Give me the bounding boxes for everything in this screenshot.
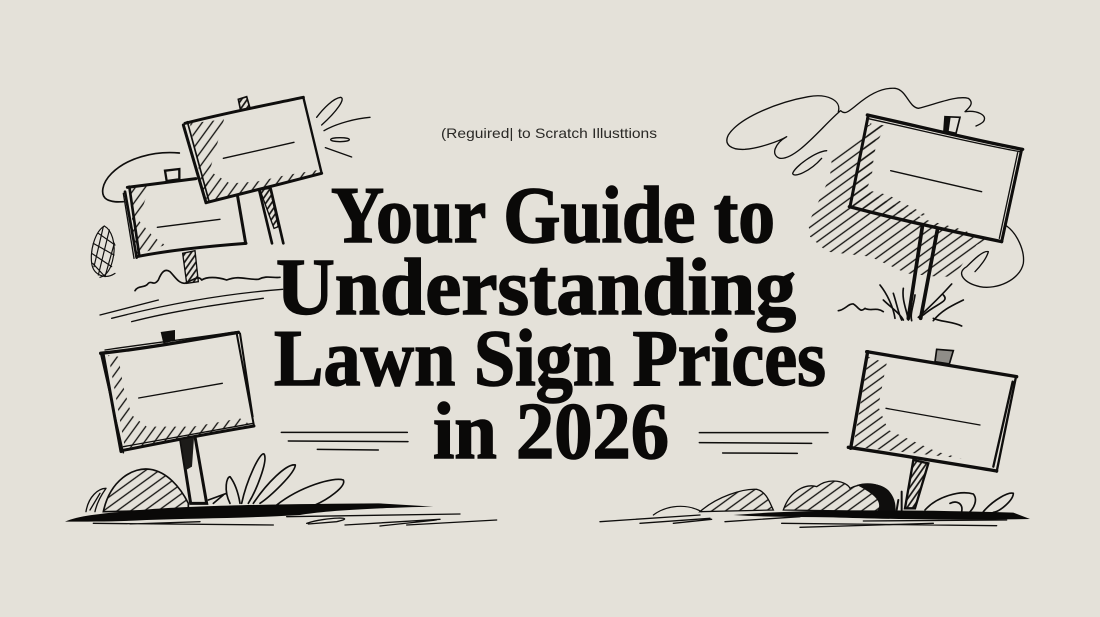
grass leaves: [208, 454, 344, 505]
ground scribble: [65, 503, 497, 526]
right curl: [962, 226, 1024, 287]
sign post: [908, 227, 937, 318]
small loop: [793, 151, 827, 175]
sign frame: [849, 115, 1023, 242]
motion flourishes: [317, 97, 370, 157]
sign hatching: [108, 355, 248, 448]
title: [274, 172, 826, 476]
hills: [653, 481, 1013, 515]
swirl cloud: [727, 88, 985, 158]
text lines: [281, 432, 408, 450]
grass tuft: [838, 284, 963, 326]
small mound: [86, 488, 106, 512]
sign frame: [848, 352, 1017, 472]
grass line: [135, 270, 280, 291]
title: in 2026: [433, 388, 669, 476]
small caption: (Reguired| to Scratch Illusttions: [441, 125, 657, 141]
illustration: two overlapping signs, top left: [91, 97, 370, 322]
sign frame: [101, 332, 254, 453]
illustration: sign and ground, bottom right: [600, 349, 1030, 527]
sign post: [181, 437, 207, 503]
title: Lawn Sign Prices: [274, 315, 826, 403]
sign inner hatching: [850, 123, 930, 217]
hill: [103, 469, 188, 512]
title: Understanding: [276, 244, 796, 332]
hatching shadow: [808, 125, 987, 277]
big sign: [183, 97, 322, 243]
illustration: sign, top right: [727, 88, 1024, 326]
sign face: [870, 130, 1017, 240]
sign post: [905, 460, 928, 508]
mesh scribble: [91, 226, 115, 277]
sign post cap: [935, 349, 953, 364]
ground strokes: [100, 289, 283, 322]
illustration: sign and ground, bottom left: [65, 330, 497, 526]
swirl behind small sign: [103, 153, 179, 202]
text lines: [699, 433, 828, 453]
small sign: [123, 169, 246, 283]
ground scribble: [600, 510, 1030, 527]
sign post cap: [161, 330, 175, 343]
title: Your Guide to: [331, 172, 775, 260]
sign post cap: [944, 117, 960, 133]
sign hatching: [853, 357, 962, 458]
